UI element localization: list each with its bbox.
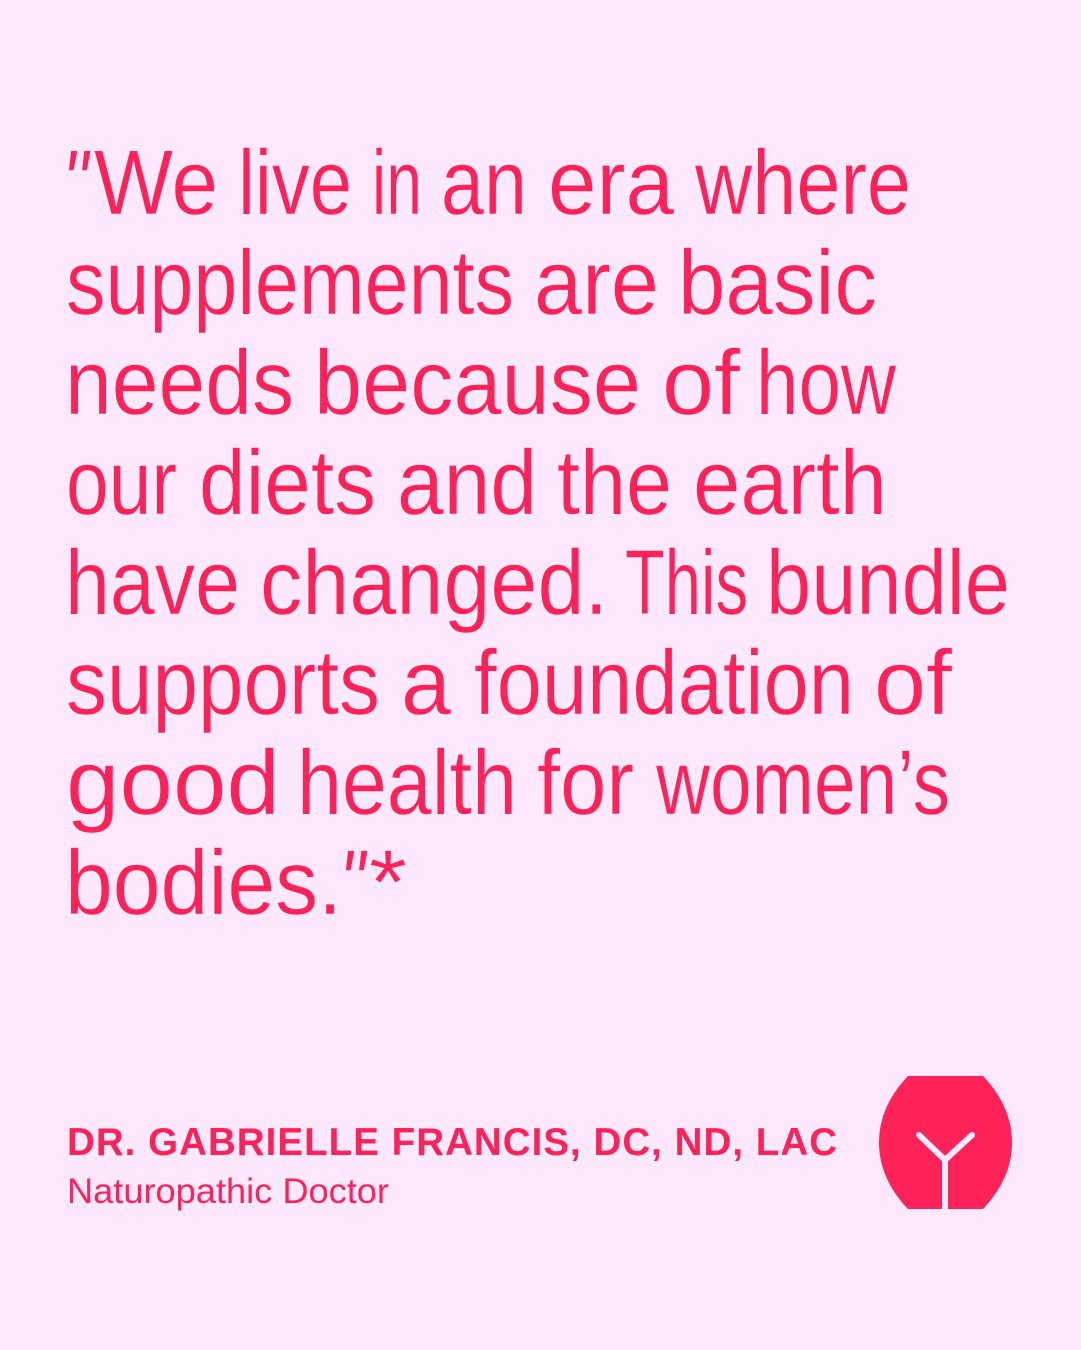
- quote text: changed.: [260, 532, 608, 634]
- quote text: our: [66, 432, 177, 534]
- quote text: bundle: [766, 532, 1010, 634]
- quote text: good: [66, 732, 280, 834]
- quote text: ": [339, 832, 368, 934]
- quote text: bodies.: [65, 832, 342, 934]
- attribution role: Naturopathic Doctor: [67, 1172, 389, 1211]
- quote text: *: [369, 832, 407, 934]
- quote text: ": [62, 132, 91, 234]
- quote text: live: [238, 132, 352, 234]
- quote text: foundation: [474, 632, 854, 734]
- quote text: women’s: [655, 732, 950, 834]
- quote text: [62, 132, 1010, 934]
- quote text: how: [756, 332, 896, 434]
- quote text: and: [397, 432, 537, 534]
- quote text: supports: [66, 632, 380, 734]
- quote text: era: [548, 132, 675, 234]
- quote text: basic: [678, 232, 877, 334]
- quote text: health: [297, 732, 517, 834]
- quote text: needs: [65, 332, 294, 434]
- quote text: an: [441, 132, 527, 234]
- quote text: We: [94, 132, 218, 234]
- quote text: the: [557, 432, 672, 534]
- quote text: are: [534, 232, 659, 334]
- quote text: in: [372, 132, 422, 234]
- quote text: where: [694, 132, 911, 234]
- quote text: diets: [199, 432, 376, 534]
- quote text: of: [662, 332, 740, 434]
- quote text: of: [874, 632, 952, 734]
- quote text: earth: [693, 432, 887, 534]
- attribution name: DR. GABRIELLE FRANCIS, DC, ND, LAC: [67, 1121, 837, 1164]
- quote text: have: [65, 532, 240, 634]
- quote text: because: [314, 332, 641, 434]
- icon: logo: [879, 1076, 1012, 1210]
- quote text: a: [401, 632, 452, 734]
- quote text: supplements: [66, 232, 514, 334]
- quote text: This: [625, 532, 748, 634]
- quote text: for: [537, 732, 634, 834]
